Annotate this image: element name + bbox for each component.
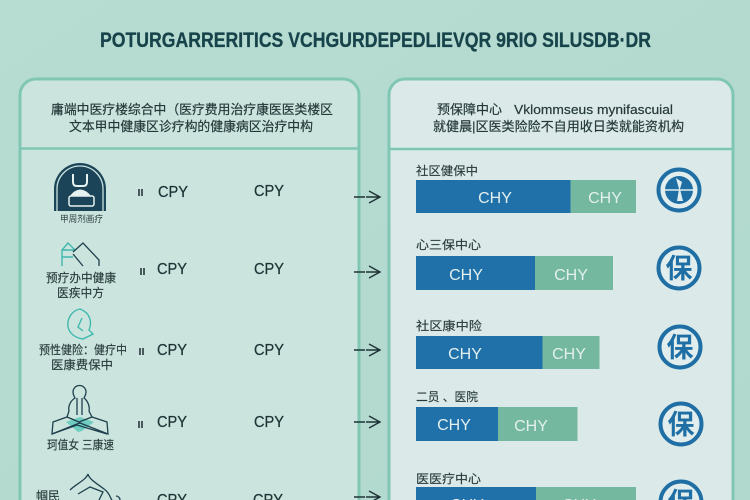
right panel heading: 预保障中心 bbox=[437, 102, 502, 117]
right panel heading: Vklommseus mynifascuial bbox=[514, 102, 673, 117]
row 1 provider bbox=[54, 163, 284, 224]
row 5 provider bbox=[36, 474, 283, 500]
stacked bar: CHY bbox=[437, 417, 471, 434]
stacked bar: CHY bbox=[554, 267, 588, 284]
stacked bar bbox=[416, 256, 613, 290]
icon: seated figure bbox=[52, 386, 108, 434]
right panel heading bbox=[433, 102, 684, 134]
row 2 coverage: 心三保中心 bbox=[416, 237, 481, 252]
icon: building outline bbox=[62, 243, 99, 266]
icon: insurance seal: 保 bbox=[666, 254, 692, 284]
row 3 provider bbox=[39, 309, 284, 372]
row 1 provider: 甲周剂画疗 bbox=[60, 213, 103, 224]
row 4 provider: 珂值女 三康速 bbox=[47, 437, 114, 452]
stacked bar bbox=[416, 487, 636, 500]
left panel heading: 庸端中医疗楼综合中（医疗费用治疗康医医类楼区 bbox=[51, 102, 333, 117]
stacked bar bbox=[416, 336, 600, 369]
row 4 coverage bbox=[416, 390, 702, 444]
row 2 provider: CPY bbox=[254, 261, 284, 278]
row 2 provider: CPY bbox=[157, 261, 187, 278]
icon: insurance seal bbox=[658, 170, 700, 210]
stacked bar bbox=[416, 407, 578, 441]
row 4 coverage: 二员 、医院 bbox=[416, 390, 478, 404]
row 4 provider: CPY bbox=[157, 414, 187, 431]
right panel heading: 就健晨|区医类险险不自用收日类就能资机构 bbox=[433, 119, 684, 134]
panel: left providers bbox=[20, 79, 359, 500]
row 5 coverage: 医医疗中心 bbox=[416, 471, 481, 486]
icon: insurance seal bbox=[658, 248, 700, 288]
icon: hospital arch bbox=[54, 163, 106, 211]
row 2 coverage bbox=[416, 237, 700, 290]
arrow 5 bbox=[354, 491, 380, 500]
stacked bar: CHY bbox=[448, 346, 482, 363]
left panel heading: 文本甲中健康区诊疗构的健康病区治疗中构 bbox=[69, 119, 313, 134]
icon: insurance seal: 保 bbox=[668, 410, 694, 440]
stacked bar: CHY bbox=[588, 190, 622, 207]
row 2 provider: 医疾中方 bbox=[57, 285, 104, 300]
stacked bar: CHY bbox=[514, 418, 548, 435]
left panel heading bbox=[51, 102, 333, 134]
row 3 provider: CPY bbox=[157, 342, 187, 359]
row 2 provider: 预疗办中健康 bbox=[46, 270, 116, 285]
row 3 coverage bbox=[416, 318, 700, 369]
arrow 4 bbox=[354, 416, 380, 428]
title: POTURGARRERITICS VCHGURDEPEDLIEVQR 9RIO SILUSDB·DR bbox=[100, 29, 651, 52]
row 5 coverage bbox=[416, 471, 702, 500]
stacked bar: CHY bbox=[478, 190, 512, 207]
arrow 2 bbox=[354, 266, 380, 278]
icon: insurance seal: 保 bbox=[666, 333, 694, 363]
row separator dots bbox=[138, 189, 145, 428]
row 3 coverage: 社区康中险 bbox=[416, 318, 482, 333]
row 2 provider bbox=[46, 243, 284, 300]
row 1 coverage: 社区健保中 bbox=[416, 163, 478, 178]
arrow 1 bbox=[354, 191, 380, 203]
stacked bar bbox=[416, 180, 636, 213]
icon: insurance seal bbox=[660, 482, 702, 500]
icon: temple bbox=[70, 474, 120, 500]
row 3 provider: CPY bbox=[254, 342, 284, 359]
icon: teal leaf bbox=[68, 309, 93, 339]
stacked bar: CHY bbox=[449, 267, 483, 284]
row 3 provider: 医康费保中 bbox=[51, 357, 113, 372]
icon: insurance seal bbox=[660, 326, 700, 368]
row 4 provider bbox=[47, 386, 284, 452]
arrow 3 bbox=[354, 344, 380, 356]
row 1 provider: CPY bbox=[158, 184, 188, 201]
icon: insurance seal bbox=[660, 404, 702, 444]
row 1 coverage bbox=[416, 163, 700, 213]
panel: right insurance bbox=[389, 79, 733, 500]
row 4 provider: CPY bbox=[254, 414, 284, 431]
stacked bar: CHY bbox=[552, 346, 586, 363]
row 1 provider: CPY bbox=[254, 183, 284, 200]
row 3 provider: 预性健险：健疗中 bbox=[39, 342, 127, 357]
